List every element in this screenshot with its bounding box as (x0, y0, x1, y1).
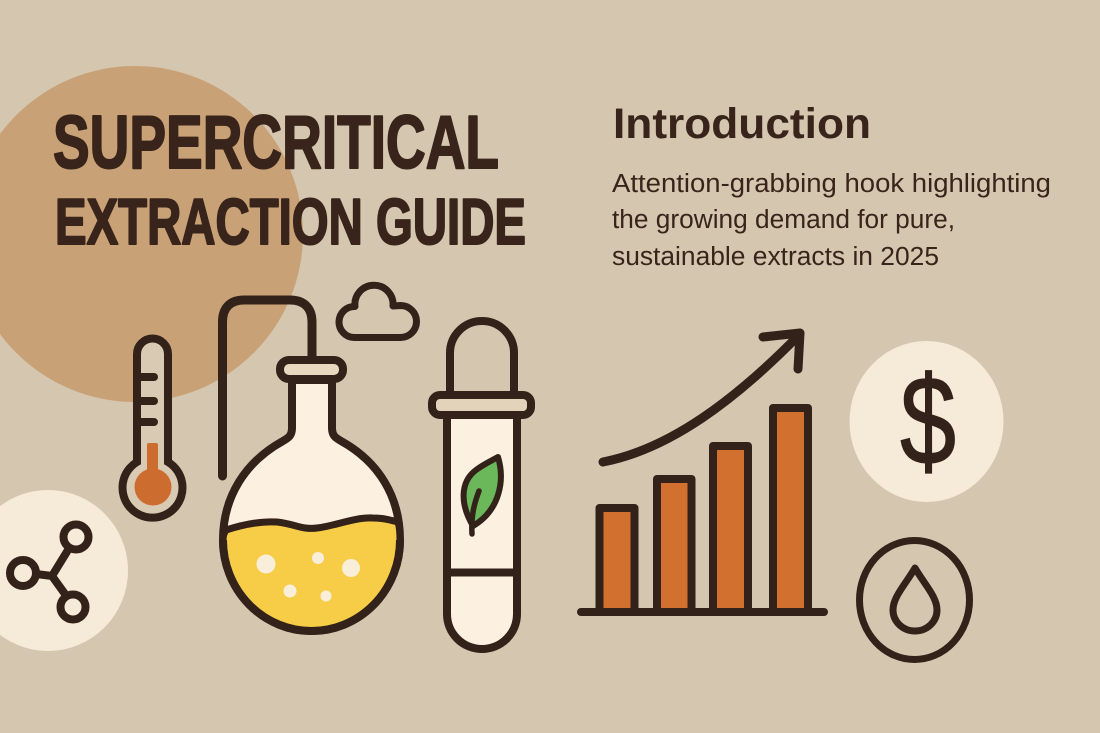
title (53, 100, 526, 258)
intro text block: sustainable extracts in 2025 (612, 243, 939, 271)
flask tube (222, 300, 312, 476)
liquid bubbles (256, 552, 360, 602)
bar chart (581, 333, 824, 612)
growth arrow (603, 333, 800, 462)
flask body (223, 380, 400, 631)
decorative large circle (0, 66, 303, 402)
icon: oil drop badge (860, 540, 970, 660)
icon: cloud (339, 285, 416, 338)
flask liquid (223, 518, 400, 631)
flask with tube (222, 300, 400, 631)
flask outline over liquid (223, 540, 400, 631)
title: SUPERCRITICAL (53, 100, 499, 184)
intro text block: Attention-grabbing hook highlighting (612, 170, 1051, 198)
icon: leaf (464, 457, 501, 534)
icon: dollar badge: $ (900, 351, 956, 492)
flask neck collar (280, 360, 343, 379)
icon: test tube with leaf (432, 321, 531, 649)
intro text block (612, 170, 1051, 271)
icon: thermometer (123, 339, 183, 518)
intro text block: the growing demand for pure, (612, 206, 955, 234)
title: EXTRACTION GUIDE (55, 185, 526, 258)
icon: molecule badge (0, 490, 128, 651)
heading: introduction: Introduction (613, 100, 871, 148)
icon: dollar badge (850, 341, 1004, 502)
